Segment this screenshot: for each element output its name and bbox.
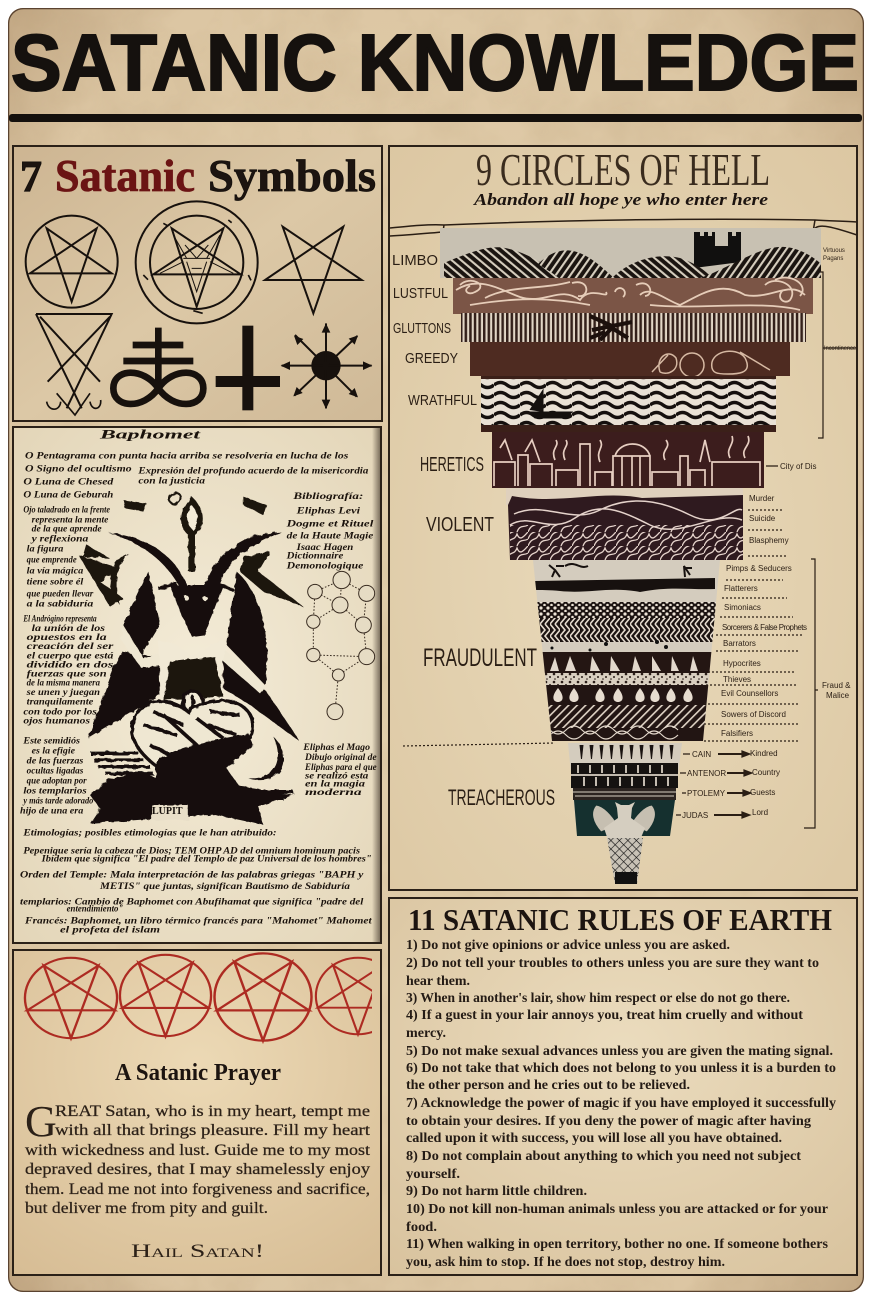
wing banners xyxy=(120,628,265,693)
icon: sigil of Baphomet xyxy=(136,201,258,323)
circle 9: Treacherous xyxy=(568,743,682,884)
heading: 11 satanic rules of earth: 11 SATANIC RULES OF EARTH xyxy=(408,902,832,937)
frozen tail xyxy=(607,838,643,884)
icon: Leviathan cross xyxy=(113,328,203,404)
crescent moon xyxy=(248,737,284,780)
manuscript handwriting: Demonologique xyxy=(285,560,364,571)
closing line: Hail Satan! xyxy=(131,1241,264,1262)
manuscript handwriting: en la magia xyxy=(305,779,365,790)
manuscript handwriting: El Andrógino representa xyxy=(23,614,97,625)
right annotations xyxy=(682,248,857,820)
right annotations: Suicide xyxy=(749,514,776,523)
panel: 7 satanic symbols: Symbols xyxy=(208,150,376,201)
torch flame xyxy=(169,492,203,572)
figure inscription: LUPIT xyxy=(152,806,183,817)
manuscript handwriting: Dictionnaire xyxy=(286,550,344,561)
icon: chaos star xyxy=(281,323,372,409)
circle 1: Limbo xyxy=(440,228,821,278)
right annotations: Fraud & xyxy=(822,681,851,690)
manuscript handwriting: Eliphas para el que xyxy=(304,762,377,773)
right annotations: Kindred xyxy=(750,749,778,758)
crescent left xyxy=(110,553,128,605)
manuscript handwriting: la unión de los xyxy=(32,623,105,634)
right annotations: Virtuous xyxy=(823,248,845,254)
top of the pit frame xyxy=(390,219,857,236)
right annotations: Malice xyxy=(826,691,850,700)
icon: inverted pentagram xyxy=(265,227,362,313)
manuscript handwriting: O Luna de Geburah xyxy=(23,489,113,500)
manuscript handwriting: se realizó esta xyxy=(304,770,369,781)
right annotations: Falsifiers xyxy=(721,729,753,738)
prayer text: them. Lead me not into forgiveness and sacrifice, xyxy=(25,1181,370,1198)
right annotations: Flatterers xyxy=(724,584,758,593)
list of rules: 2) Do not tell your troubles to others unless you are sure they want to xyxy=(406,955,819,970)
panel: Baphomet manuscript xyxy=(13,427,381,943)
list of rules: 4) If a guest in your lair annoys you, treat him cruelly and without xyxy=(406,1007,804,1022)
list of rules: 10) Do not kill non-human animals unless you are attacked or for your xyxy=(406,1201,828,1216)
manuscript handwriting: Pepenique sería la cabeza de Dios; TEM OHP AD del omnium hominum pacis xyxy=(23,845,360,856)
sephirot tree diagram xyxy=(307,571,375,720)
list of rules: 7) Acknowledge the power of magic if you have employed it successfully xyxy=(406,1095,836,1110)
dark lower body and ground xyxy=(90,772,293,825)
list of rules: 5) Do not make sexual advances unless you are given the mating signal. xyxy=(406,1043,833,1058)
right annotations: CAIN xyxy=(692,750,711,759)
crossed legs xyxy=(132,701,253,775)
manuscript handwriting: Etimologías; posibles etimologías que le han atribuido: xyxy=(22,828,277,839)
right annotations: Thieves xyxy=(723,675,751,684)
manuscript handwriting: hijo de una era xyxy=(20,805,83,816)
manuscript handwriting: Eliphas Levi xyxy=(295,505,360,516)
manuscript handwriting: moderna xyxy=(305,787,362,798)
prayer text: with all that brings pleasure. Fill my heart xyxy=(55,1122,371,1139)
manuscript handwriting: los templarios xyxy=(23,785,87,796)
manuscript handwriting: METIS" que juntas, significan Bautismo de Sabiduría xyxy=(99,881,350,892)
manuscript handwriting: O Pentagrama con punta hacia arriba se resolvería en lucha de los xyxy=(25,450,349,461)
manuscript handwriting: el profeta del islam xyxy=(60,924,161,935)
list of rules: hear them. xyxy=(406,973,470,988)
right annotations: PTOLEMY xyxy=(687,789,726,798)
right annotations: Pagans xyxy=(823,256,843,262)
manuscript handwriting: opuestos en la xyxy=(27,632,107,643)
panel: 9 circles of hell xyxy=(389,144,857,890)
list of rules: to obtain your desires. If you deny the power of magic after having xyxy=(406,1113,811,1128)
list of rules: called upon it with success, you will lose all you have obtained. xyxy=(406,1130,782,1145)
prayer text: G xyxy=(25,1097,57,1146)
panel: 11 satanic rules of earth xyxy=(389,898,857,1275)
icon: red pentagram 2 xyxy=(120,955,211,1036)
manuscript handwriting: templarios: Cambio de Baphomet con Abufihamat que significa "padre del xyxy=(20,896,364,907)
list of rules: mercy. xyxy=(406,1025,446,1040)
circle labels: GREEDY xyxy=(405,350,458,367)
brackets and arrows xyxy=(403,272,857,828)
manuscript handwriting: y más tarde adorado xyxy=(22,795,93,806)
horns xyxy=(108,532,282,587)
hatched ground xyxy=(90,753,293,798)
head xyxy=(170,585,223,637)
manuscript handwriting: O Luna de Chesed xyxy=(23,476,114,487)
list of rules: 6) Do not take that which does not belong to you unless it is a burden to xyxy=(406,1060,836,1075)
manuscript handwriting: Este semidiós xyxy=(22,735,80,746)
right annotations: Hypocrites xyxy=(723,659,761,668)
right annotations: Pimps & Seducers xyxy=(726,564,792,573)
circle 8: Fraudulent xyxy=(530,560,725,742)
Lucifer figure xyxy=(593,802,655,840)
manuscript handwriting: que emprende xyxy=(27,554,77,565)
list of rules: 9) Do not harm little children. xyxy=(406,1183,587,1198)
prayer text: depraved desires, that I may shamelessly enjoy xyxy=(25,1161,370,1178)
manuscript handwriting: que pueden llevar xyxy=(27,589,94,600)
list of rules: the other person and he cries out to be relieved. xyxy=(406,1077,690,1092)
circle 4: Greedy xyxy=(470,342,790,377)
manuscript handwriting xyxy=(20,427,377,935)
icon: sigil of Lucifer xyxy=(36,314,112,415)
prayer text: with wickedness and lust. Guide me to my most xyxy=(25,1142,371,1159)
heading: 7 Satanic Symbols: 7 xyxy=(20,152,42,201)
right annotations: Evil Counsellors xyxy=(721,689,778,698)
right annotations: Country xyxy=(752,768,780,777)
figure: winged goat-headed Baphomet xyxy=(78,492,303,825)
feathers behind the head xyxy=(78,497,303,607)
manuscript handwriting: Eliphas el Mago xyxy=(302,742,370,753)
manuscript handwriting: Bibliografía: xyxy=(292,491,363,502)
manuscript handwriting: Ojo taladrado en la frente xyxy=(23,504,111,515)
right annotations: Barrators xyxy=(723,639,756,648)
circle 2: Lustful xyxy=(453,278,813,314)
caduceus and eye xyxy=(183,691,203,712)
manuscript handwriting: es la efigie xyxy=(32,745,76,756)
manuscript handwriting: representa la mente xyxy=(32,514,109,525)
circle labels: TREACHEROUS xyxy=(448,785,555,810)
prayer text: but deliver me from pity and guilt. xyxy=(25,1200,268,1217)
torso xyxy=(158,641,227,698)
manuscript handwriting: Dibujo original de xyxy=(304,752,377,763)
manuscript handwriting: con todo por los xyxy=(23,706,97,717)
circle labels: GLUTTONS xyxy=(393,320,451,337)
icon: circled inverted pentagram xyxy=(26,216,118,308)
manuscript handwriting: Francés: Baphomet, un libro térmico francés para "Mahomet" Mahomet xyxy=(24,915,372,926)
title rule xyxy=(9,114,862,122)
symbols group xyxy=(26,201,372,415)
list of rules: 1) Do not give opinions or advice unless you are asked. xyxy=(406,937,730,952)
right annotations: Blasphemy xyxy=(749,536,789,545)
manuscript handwriting: Expresión del profundo acuerdo de la misericordia xyxy=(137,465,369,476)
manuscript handwriting: de las fuerzas xyxy=(27,755,84,766)
icon: red pentagram 3 xyxy=(214,953,312,1041)
manuscript handwriting: y reflexiona xyxy=(30,534,89,545)
circle 6: Heretics xyxy=(492,432,764,488)
panel: a satanic prayer xyxy=(13,950,400,1275)
manuscript handwriting: a la sabiduría xyxy=(27,599,94,610)
right annotations: Incontinence xyxy=(824,346,857,352)
circle labels: LIMBO xyxy=(392,252,438,269)
right annotations: Sorcerers & False Prophets xyxy=(722,623,807,632)
right annotations: Simoniacs xyxy=(724,603,761,612)
circle labels: LUSTFUL xyxy=(393,285,448,302)
manuscript handwriting: de la Haute Magie xyxy=(287,530,374,541)
lower wings xyxy=(88,652,300,742)
circle 5: Wrathful xyxy=(481,376,776,432)
red pentagrams row xyxy=(25,953,400,1041)
circle 3: Gluttons xyxy=(461,313,806,342)
icon: red pentagram 1 xyxy=(25,958,117,1038)
manuscript handwriting: creación del ser xyxy=(27,641,114,652)
right annotations: ANTENOR xyxy=(687,769,726,778)
prayer text xyxy=(25,1097,371,1217)
manuscript handwriting: ocultas ligadas xyxy=(27,765,84,776)
right annotations: Guests xyxy=(750,788,775,797)
circle labels: WRATHFUL xyxy=(408,392,477,409)
manuscript handwriting: Baphomet xyxy=(98,427,201,441)
manuscript handwriting: fuerzas que son xyxy=(27,669,107,680)
list of rules: you, ask him to stop. If he does not stop, destroy him. xyxy=(406,1254,725,1269)
manuscript handwriting: Isaac Hagen xyxy=(296,542,353,553)
circle labels xyxy=(392,252,555,810)
right annotations: JUDAS xyxy=(682,811,708,820)
dark folds of the legs xyxy=(153,733,253,802)
icon: inverted cross xyxy=(216,326,280,410)
manuscript handwriting: tranquilamente xyxy=(27,696,94,707)
right annotations: City of Dis xyxy=(780,462,816,471)
manuscript handwriting: la vía mágica xyxy=(27,565,84,576)
right annotations: Lord xyxy=(752,808,768,817)
manuscript handwriting: O Signo del ocultismo xyxy=(25,464,132,475)
prayer text: REAT Satan, who is in my heart, tempt me xyxy=(55,1103,370,1120)
list of rules: yourself. xyxy=(406,1166,460,1181)
right annotations: Sowers of Discord xyxy=(721,710,786,719)
manuscript handwriting: de la misma manera xyxy=(27,678,100,689)
circle labels: FRAUDULENT xyxy=(423,644,537,672)
manuscript handwriting: Ibídem que significa "El padre del Templo de paz Universal de los hombres" xyxy=(41,854,372,865)
list of rules: food. xyxy=(406,1219,437,1234)
upper wings xyxy=(123,572,267,685)
manuscript handwriting: la figura xyxy=(27,544,64,555)
circle labels: VIOLENT xyxy=(426,514,494,536)
list of rules: 3) When in another's lair, show him respect or else do not go there. xyxy=(406,990,790,1005)
manuscript handwriting: ojos humanos xyxy=(23,715,90,726)
circle labels: HERETICS xyxy=(420,454,484,476)
panel: 7 satanic symbols xyxy=(13,146,382,421)
circle 7: Violent xyxy=(506,488,743,560)
list of rules: 11) When walking in open territory, bother no one. If someone bothers xyxy=(406,1236,828,1251)
manuscript handwriting: entendimiento" xyxy=(67,904,123,915)
manuscript handwriting: con la justicia xyxy=(138,475,205,486)
manuscript handwriting: Orden del Temple: Mala interpretación de las palabras griegas "BAPH y xyxy=(20,870,364,881)
manuscript handwriting: el cuerpo que está xyxy=(27,650,114,661)
manuscript handwriting: dividido en dos xyxy=(27,659,114,670)
panel: 7 satanic symbols: Satanic xyxy=(55,150,195,201)
subheading: Abandon all hope ye who enter here xyxy=(473,190,769,209)
list of rules: 8) Do not complain about anything to which you need not subject xyxy=(406,1148,802,1163)
manuscript handwriting: Dogme et Rituel xyxy=(285,519,374,530)
manuscript handwriting: que adoptan por xyxy=(27,775,87,786)
manuscript handwriting: de la que aprende xyxy=(32,524,102,535)
heading: a satanic prayer: A Satanic Prayer xyxy=(115,1060,281,1086)
manuscript handwriting: se unen y juegan xyxy=(26,687,100,698)
icon: red pentagram 4, cropped xyxy=(314,956,372,1038)
list of rules xyxy=(406,937,836,1269)
manuscript handwriting: tiene sobre él xyxy=(27,576,84,587)
right annotations: Murder xyxy=(749,494,775,503)
